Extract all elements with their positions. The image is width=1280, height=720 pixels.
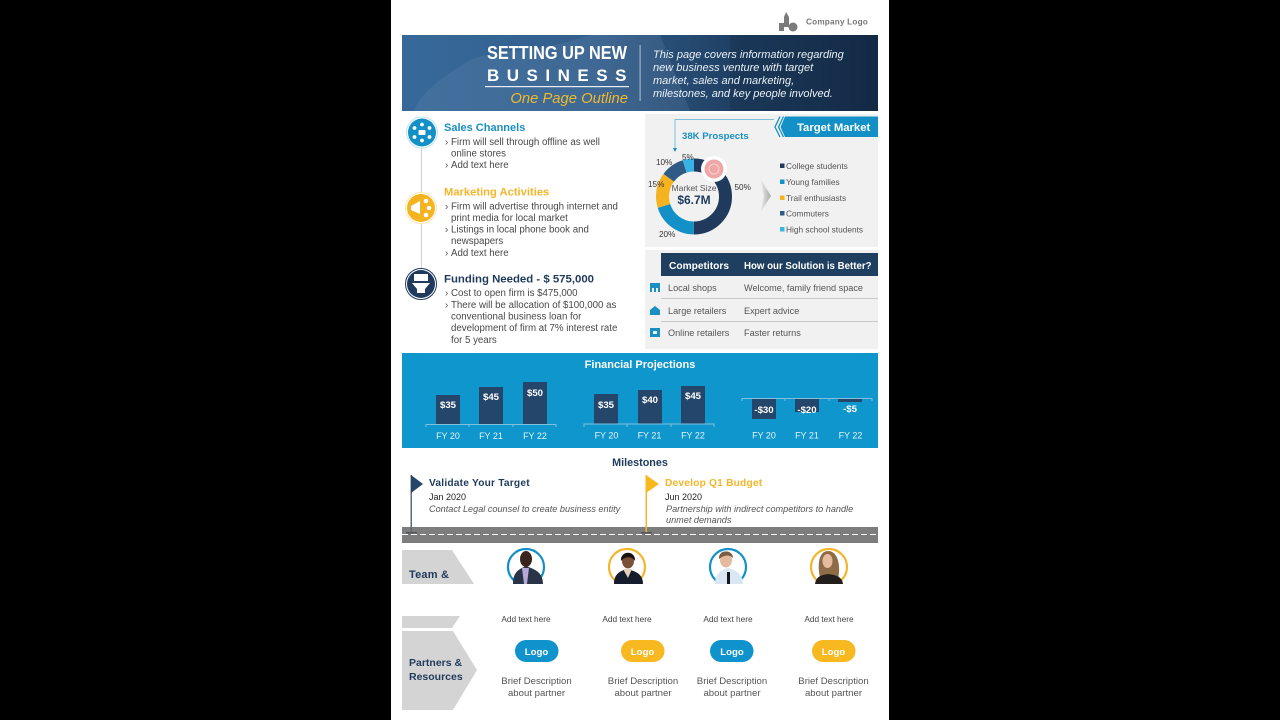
market size label bbox=[672, 183, 717, 207]
team captions: Add text here bbox=[804, 614, 854, 624]
team label: Team & bbox=[409, 569, 449, 581]
funding text: Funding Needed - $ 575,000 bbox=[444, 274, 594, 286]
target market tab: Target Market bbox=[797, 122, 870, 134]
bar chart 2: $40 bbox=[642, 395, 658, 406]
partners label: Partners & bbox=[409, 657, 463, 669]
market size label: Market Size bbox=[672, 183, 717, 193]
team label bbox=[402, 550, 474, 584]
table header: How our Solution is Better? bbox=[744, 261, 872, 272]
bar chart 2: FY 21 bbox=[638, 430, 661, 440]
milestone: develop q1 budget bbox=[641, 475, 853, 534]
legend bbox=[780, 161, 863, 234]
sales channels text: › bbox=[445, 137, 448, 148]
table header: Competitors bbox=[669, 261, 729, 272]
sales channels text bbox=[444, 122, 600, 171]
portrait 2 bbox=[609, 549, 645, 585]
donut chart bbox=[648, 153, 751, 239]
legend: Young families bbox=[786, 177, 840, 187]
team label lower tab bbox=[402, 616, 460, 628]
funding text: development of firm at 7% interest rate bbox=[451, 323, 617, 334]
team captions: Add text here bbox=[501, 614, 551, 624]
percent labels: 15% bbox=[648, 180, 664, 189]
marketing text: › bbox=[445, 248, 448, 259]
banner description: This page covers information regarding bbox=[653, 49, 845, 61]
bar chart 1: FY 20 bbox=[436, 431, 460, 441]
funding text bbox=[444, 274, 617, 346]
bar chart 2: FY 22 bbox=[681, 430, 705, 440]
partner 2 bbox=[608, 640, 678, 699]
arrow: prospects bbox=[673, 120, 774, 152]
sales channels text: online stores bbox=[451, 148, 506, 160]
sales channels text: Sales Channels bbox=[444, 122, 525, 134]
page sheet bbox=[391, 0, 889, 720]
partner 2: Brief Description bbox=[608, 676, 678, 687]
marketing text: Marketing Activities bbox=[444, 186, 549, 198]
team captions: Add text here bbox=[703, 614, 753, 624]
target market tab bbox=[775, 116, 878, 137]
partner 3: about partner bbox=[703, 688, 761, 699]
funding text: Cost to open firm is $475,000 bbox=[451, 288, 578, 299]
banner description: milestones, and key people involved. bbox=[653, 88, 833, 100]
partner 4 bbox=[798, 640, 869, 699]
banner description bbox=[653, 49, 845, 100]
milestone: develop q1 budget: Partnership with indirect competitors to handle bbox=[666, 504, 853, 514]
icon: rocket logo bbox=[779, 12, 798, 32]
panel: financial projections bbox=[402, 353, 878, 448]
icon: marketing bbox=[406, 192, 436, 224]
milestone: validate your target: Contact Legal counsel to create business entity bbox=[429, 504, 622, 514]
milestone: develop q1 budget: Jun 2020 bbox=[665, 492, 702, 502]
partner 4: Logo bbox=[822, 647, 845, 658]
bar chart 2 bbox=[584, 386, 714, 440]
row: local shops: Welcome, family friend space bbox=[744, 283, 863, 293]
sales channels text: › bbox=[445, 160, 448, 171]
table header bbox=[661, 253, 878, 276]
road bbox=[402, 527, 878, 543]
row: local shops: Local shops bbox=[668, 283, 717, 293]
bar chart 2: FY 20 bbox=[595, 430, 618, 440]
partner 1: Brief Description bbox=[501, 676, 572, 687]
legend: Commuters bbox=[786, 208, 829, 218]
legend: College students bbox=[786, 161, 848, 171]
funding text: for 5 years bbox=[451, 335, 497, 346]
funding text: › bbox=[445, 300, 448, 311]
financial heading: Financial Projections bbox=[585, 359, 695, 371]
marketing text: newspapers bbox=[451, 236, 503, 247]
company logo bbox=[779, 12, 868, 32]
milestone: develop q1 budget: unmet demands bbox=[666, 515, 732, 525]
icon: navy flag bbox=[406, 475, 423, 534]
bar chart 1 bbox=[426, 382, 556, 441]
icon: funding bbox=[406, 268, 436, 300]
percent labels: 5% bbox=[682, 153, 694, 162]
panel: target market: 38K Prospects bbox=[682, 131, 749, 142]
bar chart 3: FY 20 bbox=[752, 430, 776, 440]
marketing text: Firm will advertise through internet and bbox=[451, 202, 618, 212]
marketing text bbox=[444, 186, 618, 259]
milestone: develop q1 budget: Develop Q1 Budget bbox=[665, 478, 763, 489]
marketing text: › bbox=[445, 202, 448, 212]
partner 2: Logo bbox=[631, 647, 654, 658]
market size label: $6.7M bbox=[677, 193, 711, 207]
team captions: Add text here bbox=[602, 614, 652, 624]
bar chart 2: $45 bbox=[685, 391, 702, 402]
row: online retailers: Online retailers bbox=[668, 328, 730, 338]
marketing text: print media for local market bbox=[451, 213, 568, 224]
title: SETTING UP NEW bbox=[487, 42, 628, 63]
milestones heading: Milestones bbox=[612, 457, 668, 469]
bar chart 3: FY 22 bbox=[839, 430, 862, 440]
marketing text: Add text here bbox=[451, 248, 509, 259]
marketing text: › bbox=[445, 224, 448, 236]
legend: Trail enthusiasts bbox=[786, 193, 846, 203]
bar chart 3: -$30 bbox=[754, 405, 774, 416]
icon: sales channels bbox=[406, 117, 438, 148]
partner 3: Logo bbox=[720, 647, 744, 658]
panel: competitors table bbox=[645, 250, 878, 349]
bar chart 3: -$20 bbox=[797, 405, 817, 416]
row: large retailers bbox=[650, 306, 799, 316]
row: online retailers bbox=[650, 328, 801, 338]
panel: target market bbox=[645, 114, 878, 247]
portrait 3 bbox=[710, 549, 746, 585]
partner 2: about partner bbox=[614, 688, 672, 699]
bar chart 3: -$5 bbox=[843, 404, 858, 415]
partner 1 bbox=[501, 640, 572, 699]
bar chart 3 bbox=[742, 398, 872, 440]
marketing text: Listings in local phone book and bbox=[451, 224, 589, 236]
banner description: market, sales and marketing, bbox=[653, 75, 794, 87]
partner 4: Brief Description bbox=[798, 676, 869, 687]
row: online retailers: Faster returns bbox=[744, 328, 801, 338]
bar chart 3: FY 21 bbox=[795, 430, 819, 440]
row: local shops bbox=[650, 283, 863, 293]
panel: left activities bbox=[406, 117, 618, 346]
icon: target badge bbox=[701, 156, 727, 182]
arrow: chevron bbox=[760, 178, 771, 213]
legend: High school students bbox=[786, 224, 863, 234]
team portraits bbox=[508, 549, 847, 585]
sales channels text: Add text here bbox=[451, 160, 509, 171]
bar chart 1: $35 bbox=[440, 400, 457, 411]
bar chart 1: $50 bbox=[527, 388, 543, 399]
partners label bbox=[402, 631, 477, 710]
funding text: There will be allocation of $100,000 as bbox=[451, 300, 616, 311]
sales channels text: Firm will sell through offline as well bbox=[451, 137, 600, 148]
milestone: validate your target bbox=[406, 475, 622, 534]
bar chart 1: $45 bbox=[483, 392, 500, 403]
milestone: validate your target: Validate Your Target bbox=[429, 478, 530, 489]
partner 3 bbox=[697, 640, 767, 699]
company logo: Company Logo bbox=[806, 18, 868, 26]
bar chart 1: FY 21 bbox=[479, 431, 503, 441]
team captions bbox=[501, 614, 854, 624]
partner 1: about partner bbox=[508, 688, 566, 699]
bar chart 2: $35 bbox=[598, 400, 615, 411]
partner 1: Logo bbox=[525, 647, 548, 658]
row: large retailers: Expert advice bbox=[744, 306, 799, 316]
title: BUSINESS bbox=[487, 66, 634, 85]
header banner bbox=[402, 35, 878, 111]
funding text: conventional business loan for bbox=[451, 312, 582, 322]
portrait 1 bbox=[508, 549, 544, 585]
icon: yellow flag bbox=[641, 475, 659, 534]
portrait 4 bbox=[811, 549, 847, 585]
row: large retailers: Large retailers bbox=[668, 306, 727, 316]
percent labels: 10% bbox=[656, 158, 672, 167]
banner description: new business venture with target bbox=[653, 62, 814, 74]
percent labels: 50% bbox=[734, 183, 751, 192]
partner 4: about partner bbox=[805, 688, 863, 699]
partner 3: Brief Description bbox=[697, 676, 767, 687]
title: One Page Outline bbox=[510, 91, 628, 107]
percent labels bbox=[648, 153, 751, 239]
title bbox=[485, 42, 634, 107]
bar chart 1: FY 22 bbox=[523, 431, 547, 441]
percent labels: 20% bbox=[659, 230, 675, 239]
funding text: › bbox=[445, 288, 448, 299]
milestone: validate your target: Jan 2020 bbox=[429, 492, 466, 502]
partners label: Resources bbox=[409, 671, 463, 683]
